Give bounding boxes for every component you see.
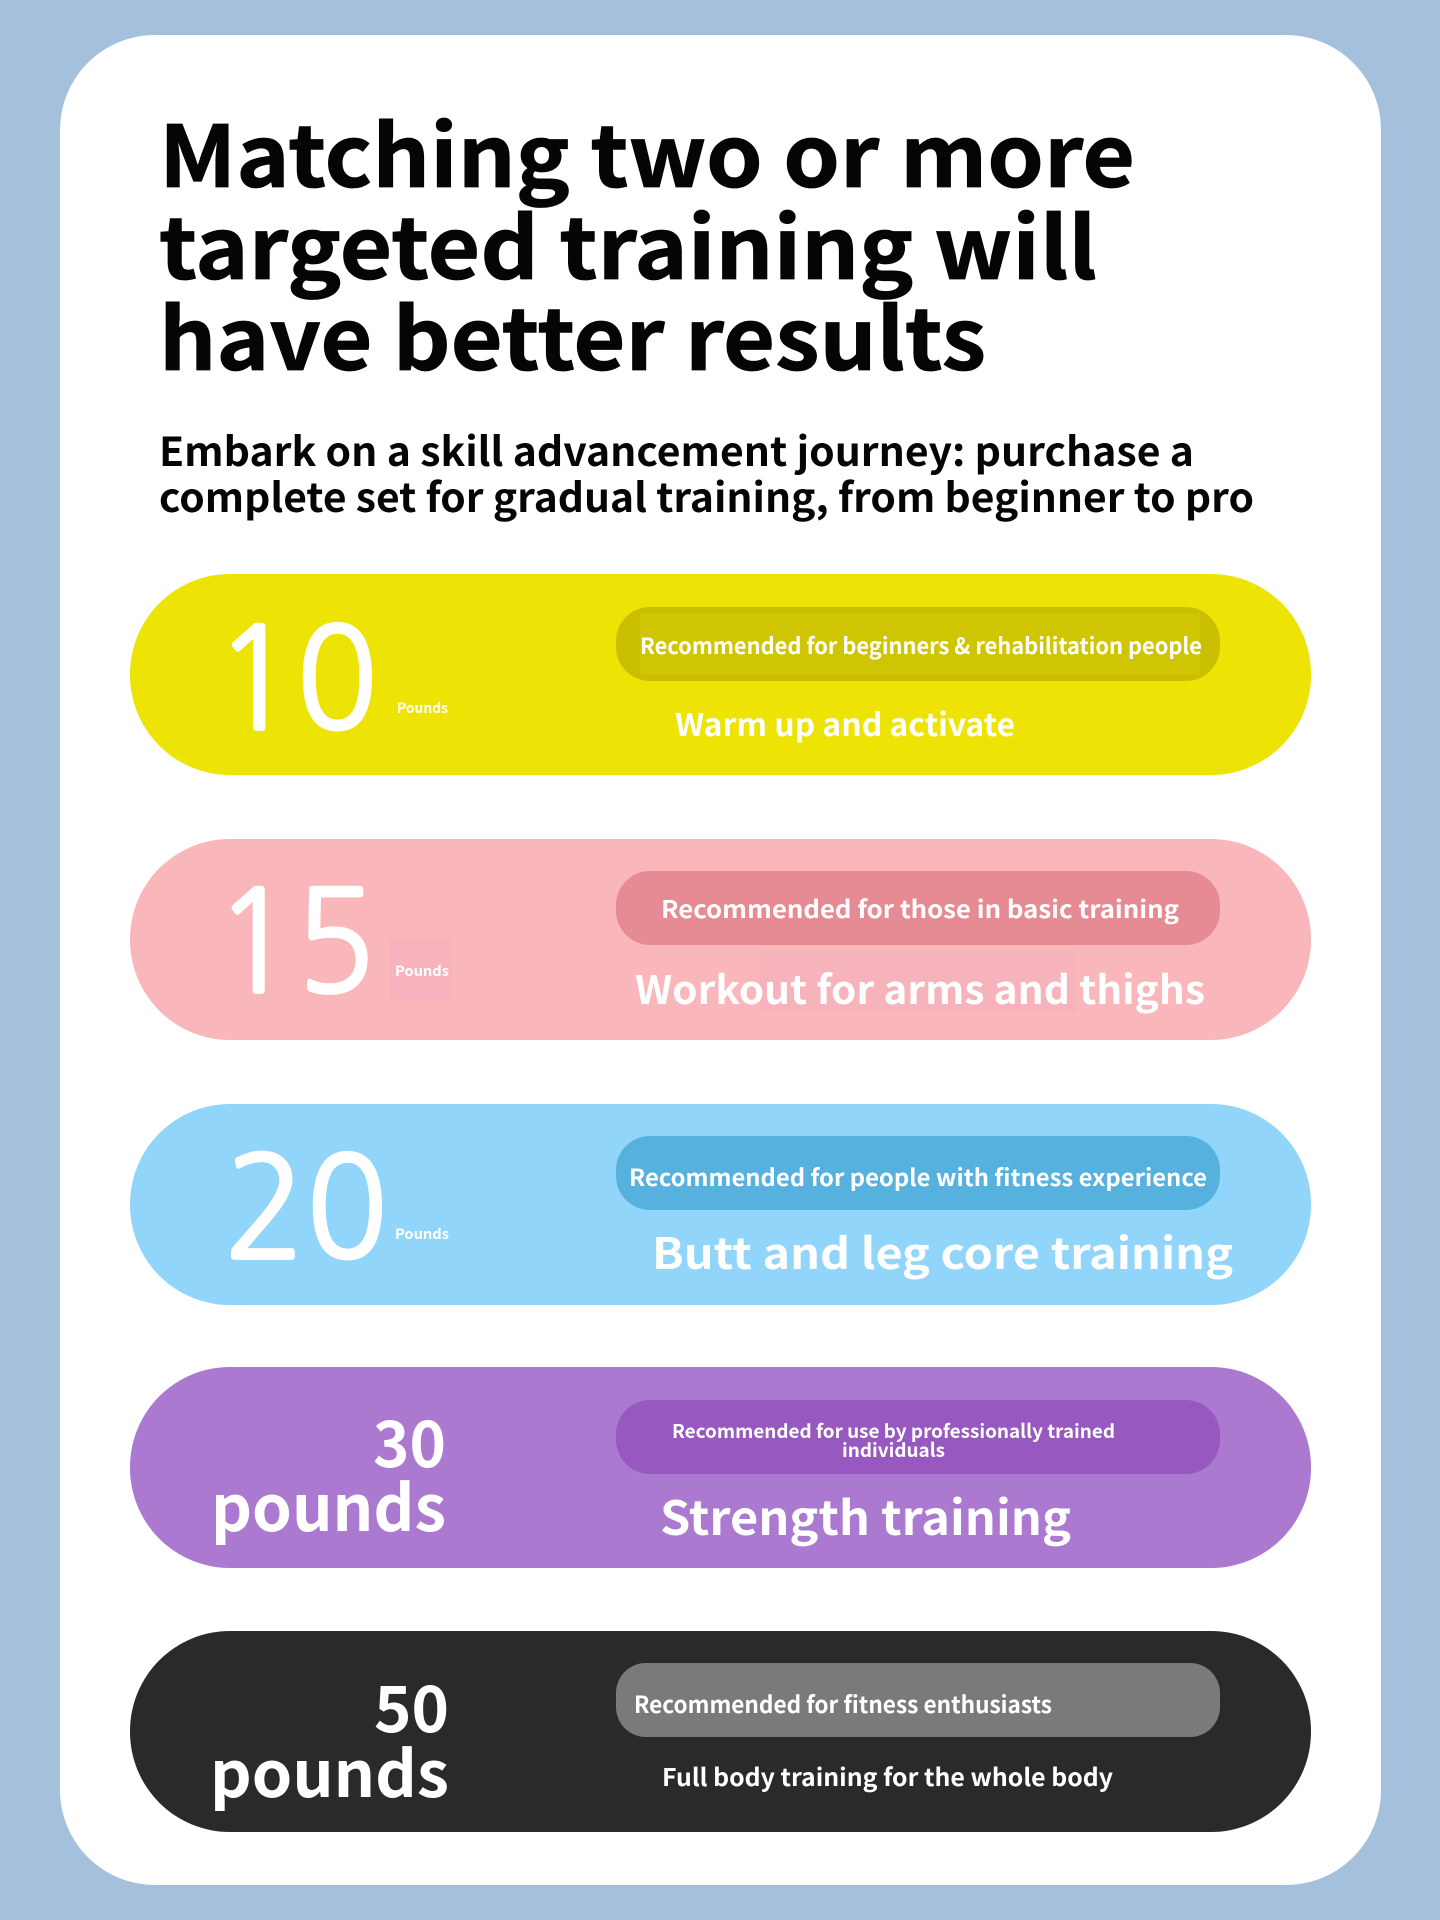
recommendation pill: Recommended for fitness enthusiasts — [634, 1686, 1052, 1720]
training goal: Butt and leg core training — [652, 1220, 1233, 1282]
subtitle: Embark on a skill advancement journey: purchase a — [159, 420, 1194, 478]
panel: 15 pounds — [130, 839, 1311, 1040]
panel: 10 pounds — [130, 574, 1311, 775]
unit label: Pounds — [395, 961, 449, 981]
recommendation pill: Recommended for those in basic training — [661, 891, 1179, 926]
unit label: Pounds — [395, 1224, 449, 1244]
training goal: Workout for arms and thighs — [635, 960, 1205, 1016]
weight label: 30 — [373, 1394, 446, 1486]
recommendation pill — [616, 607, 1220, 681]
training goal: Warm up and activate — [675, 700, 1015, 745]
recommendation pill — [616, 871, 1220, 945]
weight number: 10 — [214, 609, 378, 750]
recommendation pill — [616, 1136, 1220, 1210]
weight label — [210, 1659, 449, 1816]
title: targeted training will — [159, 181, 1097, 304]
weight number: 15 — [214, 872, 376, 1013]
weight label: pounds — [210, 1724, 449, 1816]
training goal: Full body training for the whole body — [662, 1759, 1113, 1794]
title — [159, 89, 1135, 395]
unit label: Pounds — [397, 698, 448, 718]
subtitle — [159, 420, 1254, 524]
recommendation pill: Recommended for use by professionally trained — [672, 1417, 1115, 1444]
title: Matching two or more — [159, 89, 1135, 212]
panel: 50 pounds — [130, 1631, 1311, 1832]
weight label: 50 — [374, 1659, 449, 1751]
weight number: 20 — [224, 1138, 388, 1279]
title: have better results — [159, 272, 986, 395]
panel: 20 pounds — [130, 1104, 1311, 1305]
faint patch — [760, 950, 1076, 1012]
recommendation pill: Recommended for beginners & rehabilitation people — [640, 629, 1202, 661]
subtitle: complete set for gradual training, from beginner to pro — [159, 466, 1254, 524]
recommendation pill — [616, 1663, 1220, 1737]
weight label: pounds — [211, 1458, 446, 1550]
recommendation pill: individuals — [842, 1436, 945, 1463]
panel: 30 pounds — [130, 1367, 1311, 1568]
unit label — [390, 938, 451, 1000]
recommendation pill: Recommended for people with fitness experience — [629, 1159, 1207, 1193]
recommendation pill — [616, 1400, 1220, 1474]
training goal: Strength training — [660, 1480, 1071, 1549]
weight label — [211, 1394, 446, 1550]
